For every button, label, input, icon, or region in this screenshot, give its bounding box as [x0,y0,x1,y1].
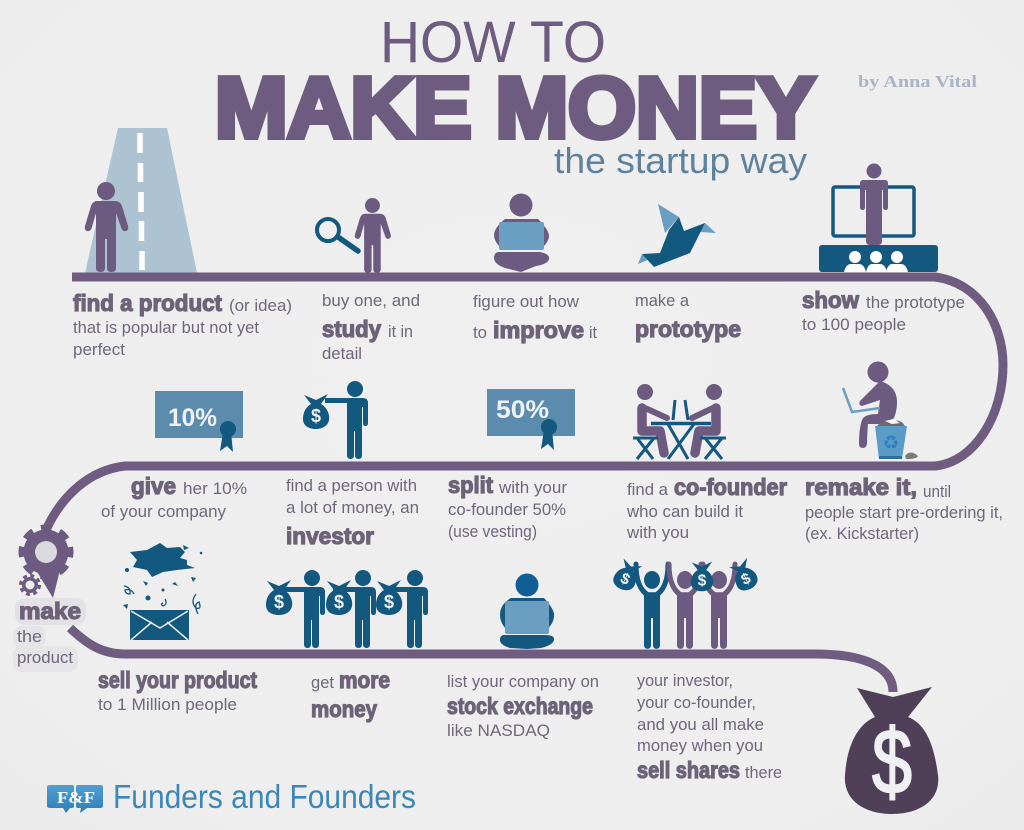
step text: find a product: that is popular but not yet [73,318,259,337]
step text: co-founder: co-founder [674,474,787,500]
step text: improve: to [473,323,487,342]
step text: investor: find a person with [286,476,417,495]
icon: investor with money bag [303,381,368,459]
step text: sell your product: to 1 Million people [98,695,237,714]
step text: show [802,287,965,334]
step text: find a product [73,290,292,359]
step text: investor: investor [286,523,374,549]
step text: improve: figure out how [473,292,580,311]
step text: study: detail [322,344,362,363]
icon: road [85,128,197,273]
step text: investor: a lot of money, an [286,498,419,517]
icon: person with laptop on recycle bin: ♻ [882,432,900,454]
icon: three people raising money bags [611,557,761,649]
icon: person at road [85,182,128,272]
title: MAKE MONEY [215,61,815,156]
step text: co-founder: who can build it [626,502,743,521]
step text: get more money: get [311,673,334,692]
title [215,10,815,156]
title: HOW TO [380,10,606,75]
step text: stock exchange: like NASDAQ [447,721,550,740]
step text: get more money: more [339,667,390,693]
logo: Funders and Founders: Funders and Founders [113,778,416,815]
byline: by Anna Vital [858,72,977,91]
step text: co-founder: find a [627,480,669,499]
step text: co-founder [626,474,787,542]
step text: improve: improve [493,317,584,343]
step text: remake it: until [923,482,951,501]
step text: get more money: money [311,696,377,722]
step text: sell shares: your investor, [637,671,733,690]
icon: three people raising money bags: $ [739,570,754,589]
step text: co-founder: with you [626,523,689,542]
step text: make the product: product [17,648,73,667]
logo: Funders and Founders: F&F [57,788,95,807]
icon: large money bag [845,687,938,814]
step text: remake it: people start pre-ordering it, [805,503,1003,522]
step text: show: the prototype [866,293,965,312]
icon: three investors with money bags: $ [384,592,394,612]
step text: improve: it [589,323,597,342]
step text: remake it: (ex. Kickstarter) [805,524,919,543]
step text: give [101,473,247,521]
step text: prototype [635,291,741,342]
step text: study: buy one, and [322,291,420,310]
icon: 10% certificate [155,391,243,452]
step text: make the product: the [17,627,42,646]
step text: get more money [311,667,390,722]
icon: three investors with money bags [266,570,428,648]
step text: make the product [13,598,86,672]
step text: give: give [131,473,176,499]
icon: three investors with money bags: $ [334,592,344,612]
step text: prototype: make a [635,291,690,310]
step text: split: co-founder 50% [448,500,566,519]
step text: remake it [805,474,1003,543]
icon: 10% certificate: 10% [168,404,217,432]
step text: split: (use vesting) [448,522,537,541]
step text: prototype: prototype [635,316,741,342]
step text: study [322,291,420,363]
step text: stock exchange [447,672,599,740]
icon: gears [20,528,70,598]
step text: sell shares: sell shares [637,757,740,783]
icon: person with laptop on recycle bin [843,362,918,459]
icon: cofounders at table [633,384,726,459]
step text: improve [473,292,597,343]
step text: sell shares: there [745,763,782,782]
step text: split: with your [498,478,567,497]
step text: show: to 100 people [802,315,906,334]
step text: show: show [802,287,859,313]
step text: investor [286,476,419,549]
subtitle: the startup way [554,140,807,181]
icon: origami bird [638,204,716,267]
icon: 50% certificate [487,389,575,450]
step text: give: of your company [101,502,226,521]
icon: three people raising money bags: $ [698,572,707,589]
icon: large money bag: $ [872,711,912,813]
step text: split [448,472,567,541]
step text: stock exchange: list your company on [447,672,599,691]
step text: study: it in [388,322,413,341]
step text: remake it: remake it, [805,474,917,500]
step text: find a product: (or idea) [229,296,292,315]
step text: find a product: perfect [73,340,125,359]
step text: sell your product: sell your product [98,667,257,693]
step text: sell shares: and you all make [637,715,764,734]
step text: find a product: find a product [73,290,222,316]
step text: split: split [448,472,493,498]
step text: give: her 10% [183,479,247,498]
icon: person with laptop [494,194,549,272]
step text: sell shares [637,671,782,783]
icon: person with magnifier [317,198,391,273]
step text: sell your product [98,667,257,714]
step text: sell shares: your co-founder, [637,693,756,712]
step text: stock exchange: stock exchange [447,693,593,719]
icon: three people raising money bags: $ [617,570,633,589]
step text: make the product: make [19,598,81,624]
icon: blue person with laptop [500,574,554,649]
step text: study: study [322,316,381,342]
winding path [46,277,1003,692]
icon: investor with money bag: $ [311,406,321,426]
icon: 50% certificate: 50% [496,396,549,424]
icon: three investors with money bags: $ [274,592,284,612]
step text: sell shares: money when you [637,736,763,755]
icon: presenter on stage [819,164,938,272]
icon: exploding envelope [123,543,202,640]
